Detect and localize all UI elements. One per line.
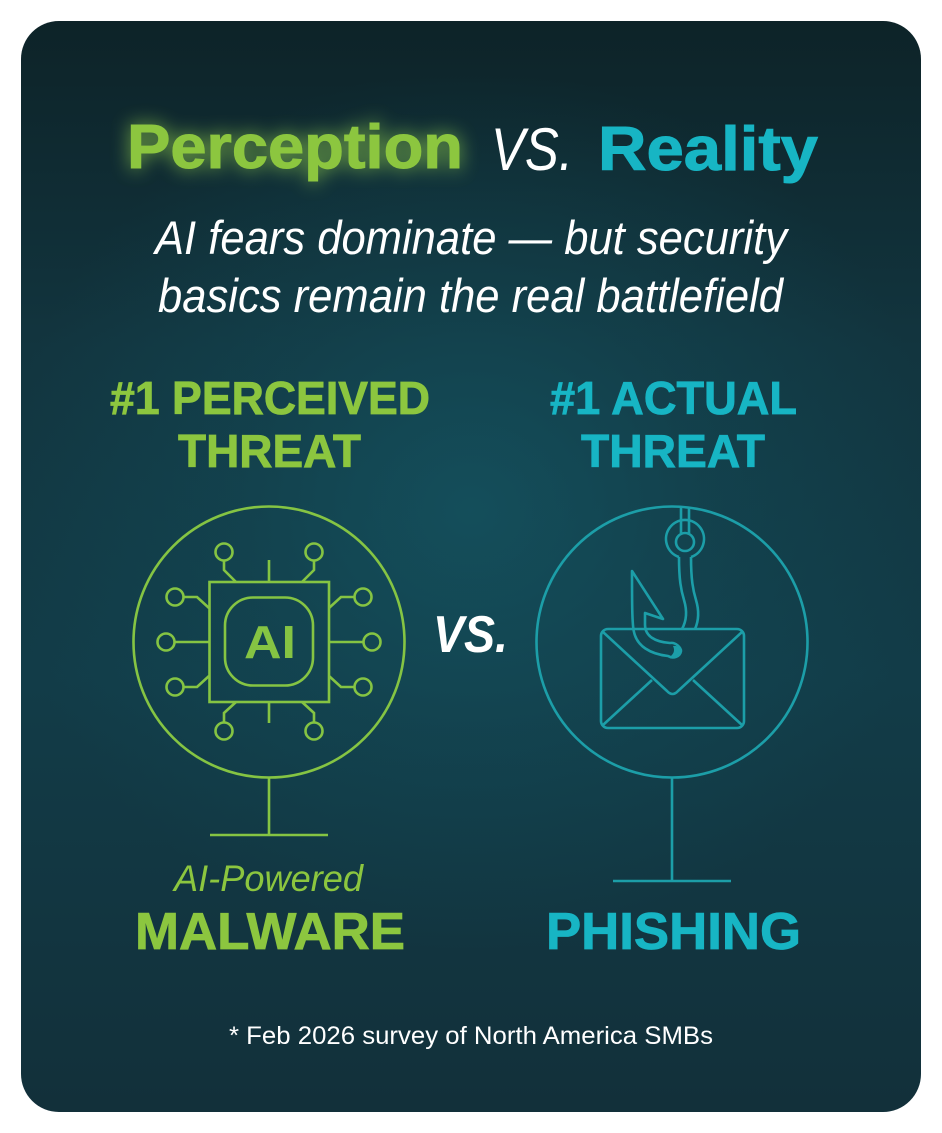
subtitle [152, 211, 789, 322]
icon: AI chip in circle on stand [134, 506, 404, 835]
title [127, 113, 819, 184]
subtitle: AI fears dominate — but security [152, 211, 789, 264]
heading: #1 actual threat [550, 372, 797, 477]
heading: #1 actual threat: #1 ACTUAL [550, 372, 797, 424]
title: Reality [598, 115, 819, 184]
heading: #1 perceived threat: THREAT [178, 425, 361, 477]
subtitle: basics remain the real battlefield [158, 269, 785, 322]
heading: #1 perceived threat: #1 PERCEIVED [110, 372, 430, 424]
label: AI-Powered malware: MALWARE [135, 903, 405, 961]
title: Perception [127, 113, 463, 182]
icon: AI chip in circle on stand: AI [244, 616, 296, 668]
title: VS. [491, 116, 573, 183]
icon: phishing hook and envelope in circle on stand [536, 506, 808, 881]
label: phishing: PHISHING [546, 903, 801, 961]
footnote: * Feb 2026 survey of North America SMBs [229, 1022, 713, 1050]
title: Perception [127, 113, 463, 182]
label: AI-Powered malware: AI-Powered [172, 858, 364, 899]
heading: #1 actual threat: THREAT [581, 425, 765, 477]
label: AI-Powered malware [135, 858, 405, 961]
vs label: VS. [433, 606, 508, 664]
heading: #1 perceived threat [110, 372, 430, 477]
